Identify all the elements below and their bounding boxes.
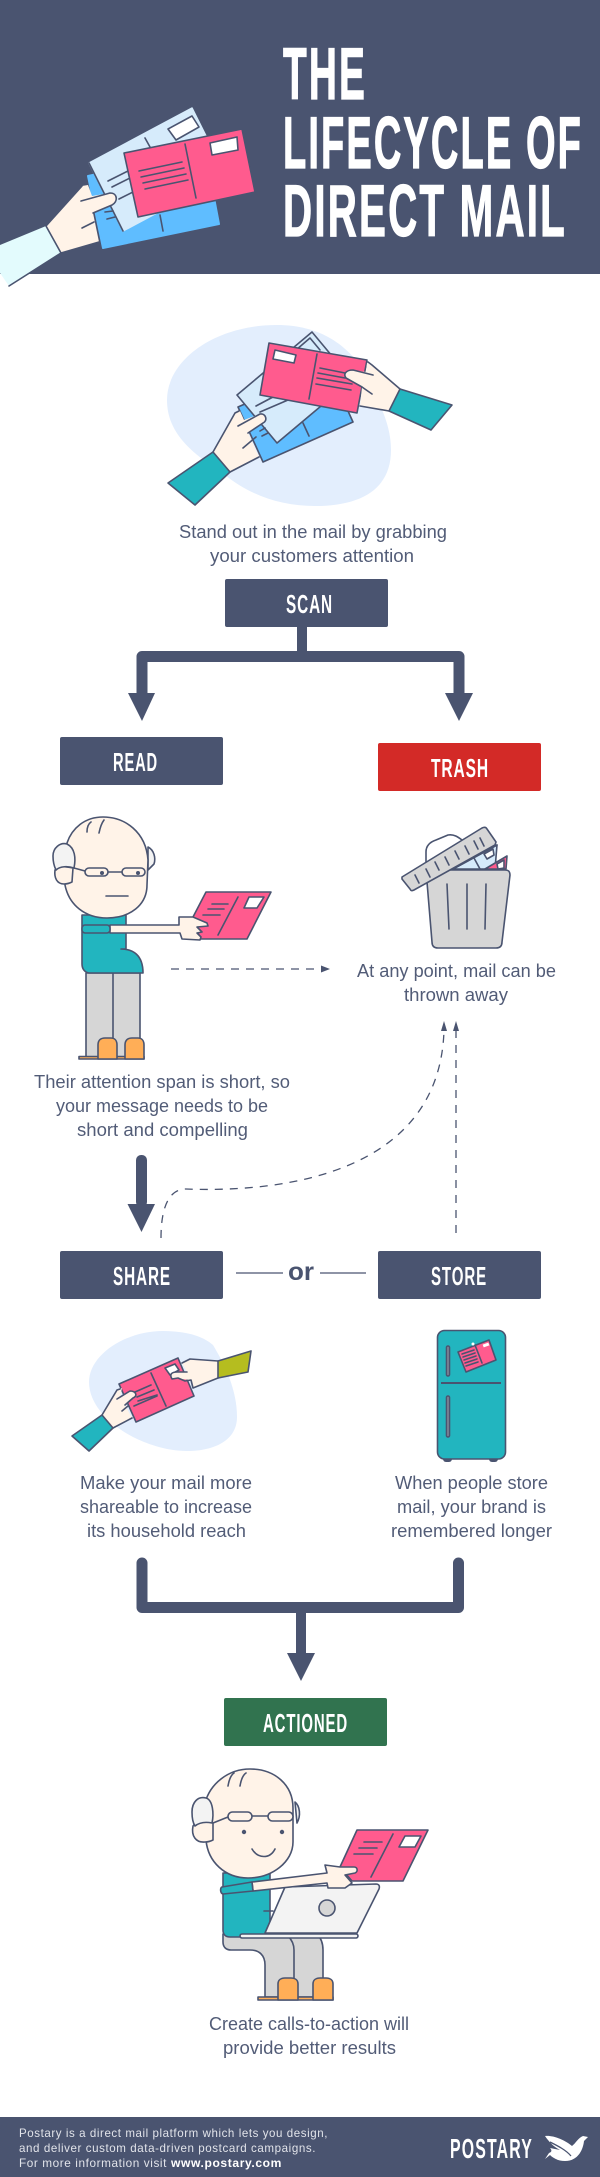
arrow: share and store merge to actioned xyxy=(142,1563,458,1681)
text: store: mail, your brand is xyxy=(397,1497,546,1517)
text: scan intro: your customers attention xyxy=(210,546,414,566)
text: share: its household reach xyxy=(87,1521,246,1541)
head xyxy=(295,1802,299,1823)
legs xyxy=(86,973,140,1057)
text: actioned: Create calls-to-action will xyxy=(209,2014,409,2034)
footer text: and deliver custom data-driven postcard campaigns. xyxy=(19,2141,316,2155)
header banner xyxy=(0,0,600,286)
text: share: Make your mail more xyxy=(80,1473,252,1493)
step: read: READ xyxy=(113,747,158,777)
head xyxy=(148,847,155,870)
text: read xyxy=(34,1072,290,1140)
text: read: short and compelling xyxy=(77,1120,248,1140)
illustration: man with laptop and postcard xyxy=(192,1769,428,2000)
title: THE xyxy=(283,34,367,115)
illustration: trash can xyxy=(402,827,510,948)
arrow: scan splits to read and trash xyxy=(128,625,473,721)
text: scan intro: Stand out in the mail by grabbing xyxy=(179,522,447,542)
footer text xyxy=(19,2126,328,2170)
arrow: dashed store to trash xyxy=(453,1021,459,1233)
text: read: your message needs to be xyxy=(56,1096,268,1116)
text: store xyxy=(391,1473,552,1541)
text: share xyxy=(80,1473,252,1541)
text: scan intro xyxy=(179,522,447,566)
arrow: read to share xyxy=(128,1155,155,1232)
footer xyxy=(0,2117,600,2177)
text: actioned xyxy=(209,2014,409,2058)
postcard xyxy=(340,1830,428,1881)
laptop xyxy=(264,1910,273,1912)
blob background xyxy=(167,325,391,506)
torso xyxy=(82,915,143,973)
text: store: remembered longer xyxy=(391,1521,552,1541)
title xyxy=(283,34,583,252)
step: actioned xyxy=(224,1698,387,1746)
step: trash xyxy=(378,743,541,791)
footer text: www.postary.com xyxy=(170,2156,282,2170)
step: store xyxy=(378,1251,541,1299)
illustration: man reading postcard xyxy=(53,817,271,1059)
step: trash: TRASH xyxy=(431,753,489,783)
illustration: handing over postcard xyxy=(167,325,452,506)
step: actioned: ACTIONED xyxy=(263,1708,348,1738)
step: share: SHARE xyxy=(113,1261,171,1291)
or connector: or xyxy=(288,1258,314,1286)
arrow: dashed share to trash xyxy=(161,1021,447,1238)
arrow: dashed read to trash xyxy=(171,966,330,972)
text: trash: At any point, mail can be xyxy=(357,961,556,981)
arm xyxy=(252,1865,357,1891)
illustration: fridge with postcard xyxy=(438,1330,506,1462)
step: read xyxy=(60,737,223,785)
text: actioned: provide better results xyxy=(223,2038,396,2058)
step: share xyxy=(60,1251,223,1299)
footer text: Postary is a direct mail platform which lets you design, xyxy=(19,2126,328,2140)
or connector xyxy=(236,1258,366,1286)
postcard xyxy=(193,892,271,939)
arm xyxy=(110,917,208,940)
step: scan xyxy=(225,579,388,627)
text: store: When people store xyxy=(395,1473,548,1493)
logo wordmark: POSTARY xyxy=(450,2133,533,2164)
illustration: sharing postcard xyxy=(72,1331,251,1451)
text: share: shareable to increase xyxy=(80,1497,252,1517)
step: store: STORE xyxy=(431,1261,487,1291)
text: read: Their attention span is short, so xyxy=(34,1072,290,1092)
text: trash: thrown away xyxy=(404,985,508,1005)
step: scan: SCAN xyxy=(286,589,333,619)
torso xyxy=(223,1873,270,1937)
icon: postary bird xyxy=(545,2136,588,2161)
footer text: For more information visit xyxy=(19,2156,167,2170)
legs xyxy=(223,1934,323,1997)
text: trash xyxy=(357,961,556,1005)
icon: hand holding mail xyxy=(0,108,255,286)
